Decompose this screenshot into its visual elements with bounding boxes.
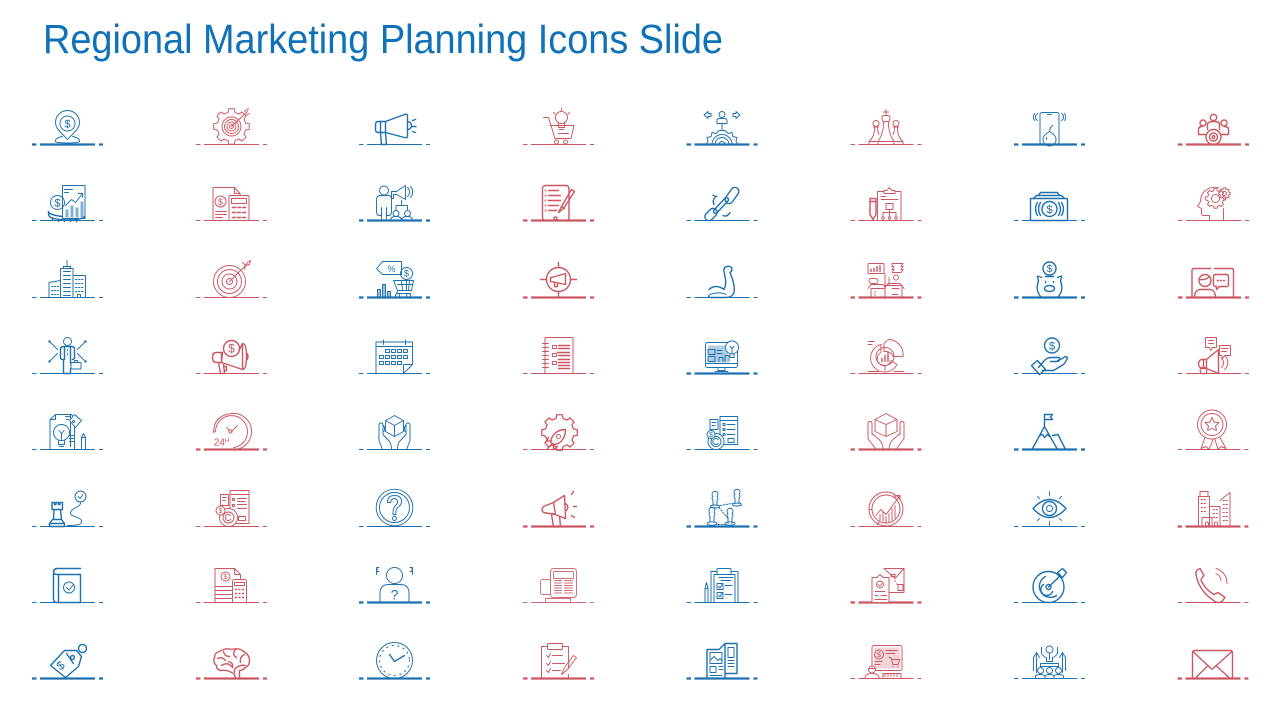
icon: spiral notebook	[523, 338, 594, 374]
icon: brain	[196, 649, 267, 678]
icon: question mark in circle	[359, 489, 430, 526]
icon: mountain with flag	[1014, 414, 1085, 450]
icon: monitor with storefront and person: $	[877, 652, 881, 659]
icon: team around target	[1178, 114, 1249, 144]
title: Regional Marketing Planning Icons Slide	[43, 16, 723, 62]
icon: stack of cash: $	[1046, 204, 1053, 216]
icon: crosshair with megaphone	[523, 262, 594, 298]
icon: calendar	[359, 340, 430, 374]
icon: discount tag, cart and sales bars: %	[387, 264, 396, 274]
icon: megaphone	[359, 114, 430, 144]
icon: city buildings	[32, 260, 103, 298]
icon: hands holding box	[359, 416, 430, 450]
icon: idea document with tag and pencil	[32, 414, 103, 450]
icon: monitor dashboard with bulb	[686, 341, 758, 374]
icon: wall clock	[359, 642, 430, 678]
icon: invoice with coins: $	[709, 432, 713, 439]
icon: growth chart in circle	[850, 492, 922, 526]
icon: envelope	[1178, 650, 1248, 678]
icon: pie chart with bars	[850, 340, 922, 374]
icon: leader with team and growth arrows	[1014, 646, 1085, 678]
icon: clipboard checklist with pen	[686, 568, 758, 602]
icon: piggy bank with coin: $	[1047, 264, 1053, 275]
icon: confused person	[359, 568, 430, 602]
icon: flexed arm muscle	[686, 266, 758, 298]
icon: tilted megaphone	[523, 492, 594, 526]
icon: document and calculator	[196, 188, 267, 220]
icon: document and calculator: $	[218, 197, 223, 207]
icon: hand holding coin	[1014, 338, 1085, 374]
icon: 24 hour clock	[196, 413, 267, 450]
icon: people network with locations	[686, 489, 758, 526]
icon: invoice with coins	[686, 416, 758, 450]
icon: book with check	[32, 568, 103, 602]
icon: smartphone with bomb	[1014, 112, 1085, 146]
icon: chain link	[686, 186, 758, 222]
icon: fax machine	[523, 568, 594, 602]
icon: person in laptop with chat bubble	[1178, 268, 1249, 298]
icon: location pin with dollar	[32, 110, 103, 144]
icon: businessman with arrows	[32, 338, 103, 374]
icon: 24 hour clock: 24	[214, 438, 225, 448]
icon: 24 hour clock: H	[225, 438, 229, 444]
icon: speaker addressing audience	[359, 186, 430, 220]
icon: award badge with star	[1178, 410, 1248, 450]
icon: confused person: ?	[391, 586, 399, 602]
icon: head with gears	[1178, 187, 1249, 220]
icon: hand holding coin: $	[1049, 340, 1055, 352]
icon: chess pieces	[850, 110, 922, 144]
icon: megaphone with speech bubbles	[1178, 338, 1249, 374]
icon: coins and growth report	[32, 186, 103, 222]
icon: discount tag, cart and sales bars: $	[404, 268, 409, 278]
icon: office towers	[1178, 492, 1248, 526]
icon: price tag with dollar	[32, 644, 103, 678]
icon: person above gear with arrows	[686, 112, 758, 144]
icon: bill with calculator	[196, 568, 267, 602]
icon: tablet checklist with pencil	[523, 186, 594, 220]
icon: coins and growth report: $	[54, 198, 61, 210]
icon: clipboard with pen	[523, 644, 594, 678]
icon: hands holding box large	[850, 414, 922, 450]
icon: clipboard and envelope	[850, 568, 922, 602]
icon: bill with calculator: $	[223, 572, 228, 581]
icon: rook with path to goal	[32, 491, 103, 526]
icon: clipboard with org chart and pencil	[850, 188, 922, 220]
icon: product boxes with charts	[850, 264, 922, 298]
icon: location pin with dollar: $	[64, 118, 71, 130]
icon: invoice with coins red: $	[219, 508, 223, 515]
icon: gear with target	[196, 108, 267, 144]
icon: price tag with dollar: $	[54, 658, 68, 673]
icon: brochure	[686, 644, 758, 678]
icon: stack of cash	[1014, 192, 1085, 220]
icon: megaphone with dollar coin	[196, 340, 267, 374]
icon: megaphone with dollar coin: $	[228, 342, 235, 356]
icon: gear with rocket	[523, 415, 594, 450]
icon: monitor with storefront and person	[850, 646, 922, 678]
icon: invoice with coins red	[196, 490, 267, 526]
icon: discount tag, cart and sales bars	[359, 262, 430, 298]
icon: eye with rays	[1014, 492, 1085, 526]
icon: telephone with signal	[1178, 568, 1248, 602]
icon: piggy bank with coin	[1014, 262, 1085, 298]
icon: bullseye with arrow	[196, 260, 267, 298]
icon: shopping cart with light bulb	[523, 108, 594, 144]
icon: target with dart	[1014, 568, 1085, 602]
